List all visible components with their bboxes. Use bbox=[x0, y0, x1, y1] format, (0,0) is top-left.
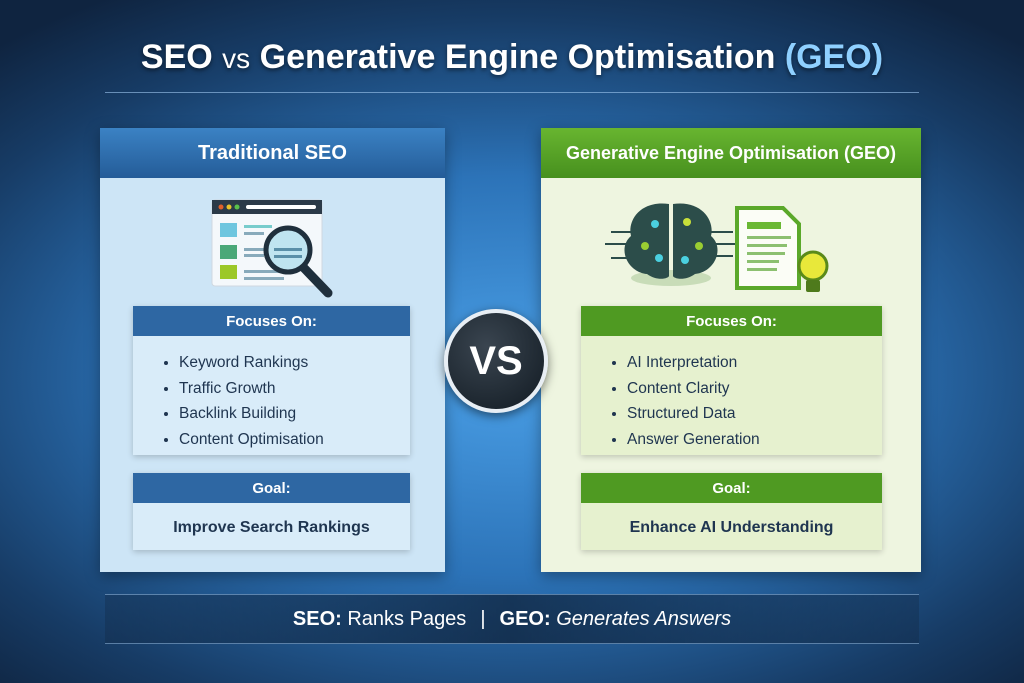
box: goal: Goal: bbox=[252, 480, 291, 496]
box: focuses on: Content Optimisation bbox=[179, 430, 324, 448]
box: focuses on: AI Interpretation bbox=[627, 354, 737, 371]
heading: GEO bbox=[541, 128, 921, 178]
box: goal: Improve Search Rankings bbox=[173, 519, 370, 536]
box: focuses on bbox=[133, 306, 410, 455]
VS badge bbox=[444, 309, 548, 413]
bottom summary bar: | bbox=[480, 608, 486, 630]
box: focuses on: Answer Generation bbox=[627, 430, 760, 448]
box: focuses on: Structured Data bbox=[627, 405, 736, 422]
box: focuses on bbox=[581, 306, 882, 455]
VS badge: VS bbox=[469, 338, 523, 382]
box: focuses on: Traffic Growth bbox=[179, 380, 275, 396]
icon: browser with magnifier bbox=[212, 200, 332, 298]
box: focuses on: Backlink Building bbox=[179, 405, 296, 422]
box: goal bbox=[581, 473, 882, 550]
bottom summary bar bbox=[105, 594, 919, 644]
box: focuses on: Focuses On: bbox=[226, 312, 317, 330]
bottom summary bar: GEO: Generates Answers bbox=[500, 608, 731, 630]
title: SEO vs Generative Engine Optimisation (GEO) bbox=[141, 38, 883, 76]
box: goal: Enhance AI Understanding bbox=[630, 519, 833, 536]
icon: brain, document and lightbulb bbox=[605, 204, 828, 292]
heading: GEO: Generative Engine Optimisation (GEO) bbox=[566, 142, 896, 162]
panel: GEO bbox=[541, 128, 921, 572]
box: focuses on: Keyword Rankings bbox=[179, 354, 308, 371]
bottom summary bar: SEO: Ranks Pages bbox=[293, 608, 466, 630]
heading: Traditional SEO bbox=[100, 128, 445, 178]
heading: Traditional SEO: Traditional SEO bbox=[198, 142, 347, 164]
box: goal bbox=[133, 473, 410, 550]
box: focuses on: Focuses On: bbox=[686, 312, 777, 330]
box: focuses on: Content Clarity bbox=[627, 380, 730, 396]
panel: traditional SEO bbox=[100, 128, 445, 572]
box: goal: Goal: bbox=[712, 480, 751, 496]
